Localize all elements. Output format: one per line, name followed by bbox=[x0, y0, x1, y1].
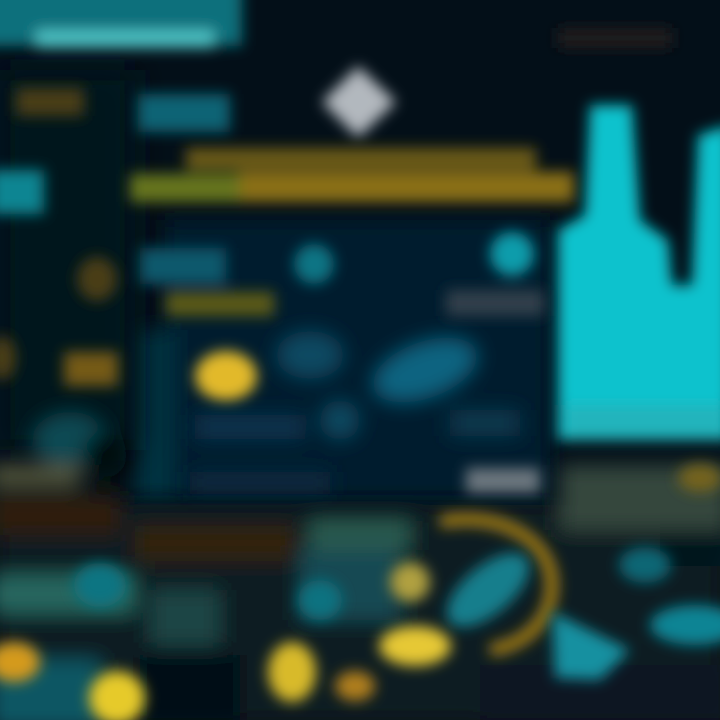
icon: gold coin bbox=[195, 351, 257, 401]
title band bbox=[0, 0, 242, 48]
gold coins bbox=[0, 562, 451, 720]
icon: gold ring arc bbox=[440, 519, 552, 650]
left column background bbox=[0, 70, 135, 450]
icon: diamond badge bbox=[322, 66, 396, 138]
left column labels bbox=[0, 88, 274, 386]
centre markers bbox=[294, 232, 544, 494]
map shapes bbox=[190, 325, 520, 494]
teal leaf bbox=[434, 539, 542, 641]
chart: cyan towers bbox=[558, 105, 720, 440]
bottom band bbox=[0, 412, 720, 720]
teal shapes lower right bbox=[74, 464, 720, 680]
panel: centre bbox=[135, 220, 550, 500]
heading: gold banner bbox=[130, 148, 574, 202]
top-right label bbox=[558, 28, 672, 48]
